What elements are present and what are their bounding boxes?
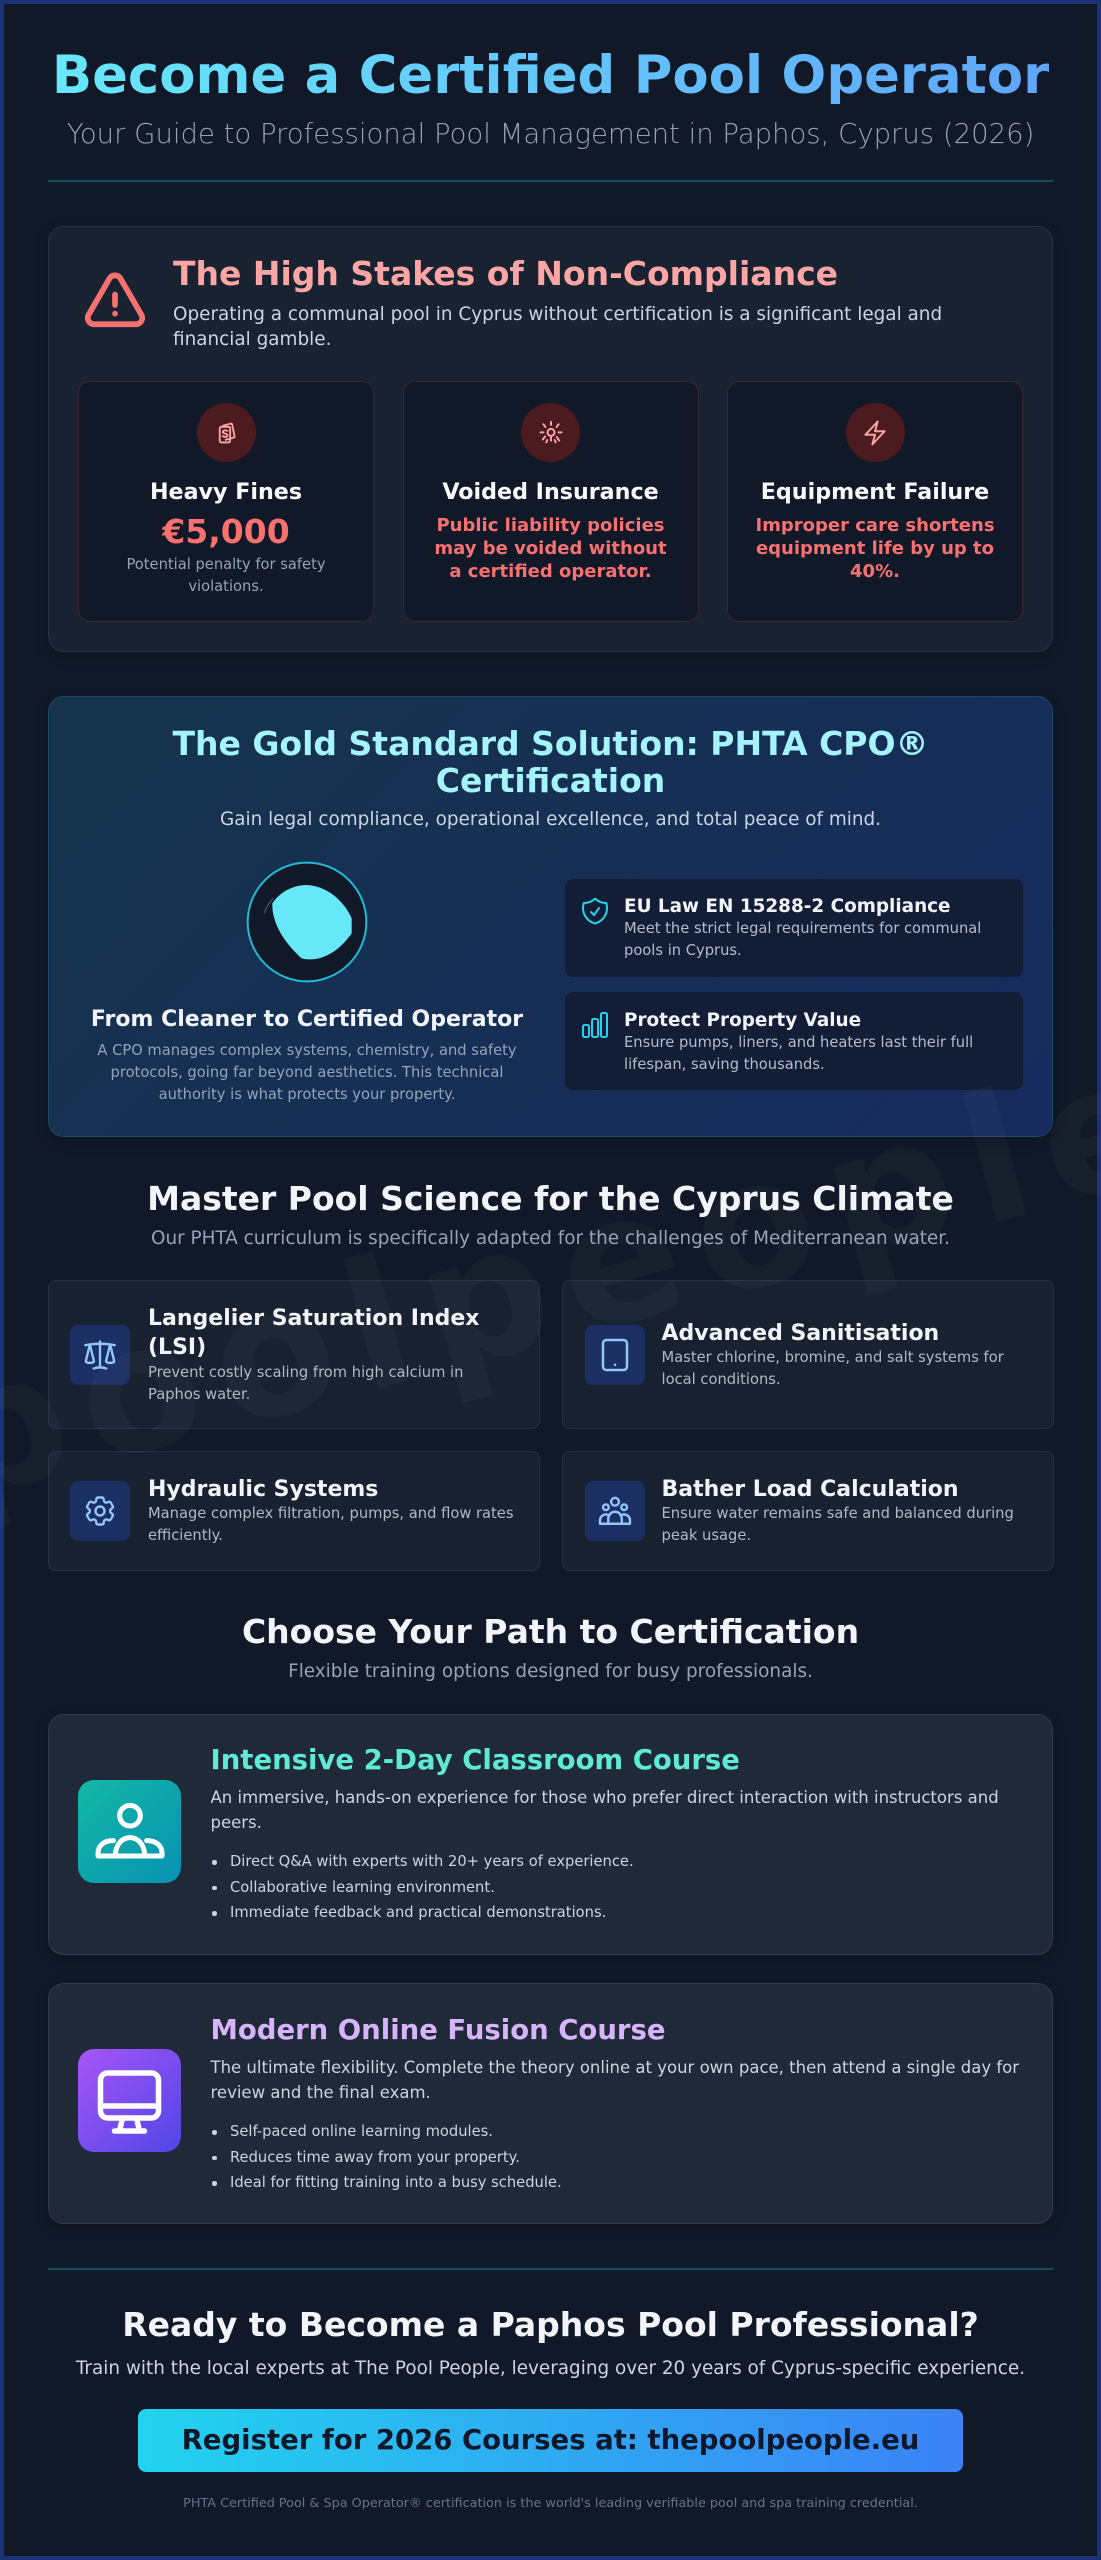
text: gold standard subtitle: Gain legal compliance, operational excellence, and total peace of mind.	[220, 809, 881, 830]
text: property value detail: lifespan, saving thousands.	[624, 1056, 825, 1073]
text: sanitisation detail	[662, 1349, 1004, 1388]
icon: fine money	[196, 403, 256, 462]
text: classroom description: peers.	[210, 1813, 262, 1832]
list: online benefits: Ideal for fitting training into a busy schedule.	[230, 2174, 562, 2191]
text: bather load detail	[662, 1505, 1014, 1544]
card: hydraulic systems	[48, 1451, 540, 1571]
list: classroom benefits: Collaborative learning environment.	[230, 1879, 495, 1896]
label: equipment failure: Equipment Failure	[761, 479, 989, 505]
text: sanitisation detail: local conditions.	[662, 1371, 781, 1388]
card: voided insurance	[402, 381, 698, 622]
text: fine description	[126, 556, 326, 595]
list: classroom benefits: Direct Q&A with experts with 20+ years of experience.	[230, 1853, 634, 1870]
icon: tablet	[585, 1325, 645, 1385]
icon: insurance spark	[521, 403, 580, 462]
text: high stakes intro: financial gamble.	[173, 329, 331, 350]
text: CPO description: authority is what protects your property.	[159, 1086, 455, 1103]
list: online benefits	[212, 2123, 562, 2191]
stat: fine amount: €5,000	[162, 512, 290, 551]
text: equipment warning: Improper care shortens	[755, 515, 995, 536]
card: equipment failure	[727, 381, 1023, 622]
text: hydraulic detail	[148, 1505, 513, 1544]
icon: scales	[70, 1325, 130, 1385]
icon: gear	[70, 1481, 130, 1541]
icon: lightning bolt	[846, 403, 904, 462]
heading: choose your path: Choose Your Path to Certification	[242, 1612, 859, 1651]
label: hydraulic systems: Hydraulic Systems	[148, 1477, 378, 1502]
text: insurance warning: may be voided without	[434, 538, 667, 559]
icon: certified badge	[246, 862, 368, 982]
heading: online course: Modern Online Fusion Course	[210, 2014, 666, 2046]
text: science subtitle: Our PHTA curriculum is specifically adapted for the challenges of Mediterranean water.	[151, 1228, 950, 1249]
list: classroom benefits	[212, 1853, 634, 1921]
card: advanced sanitisation	[562, 1280, 1054, 1429]
text: classroom description	[210, 1788, 999, 1832]
text: online description	[210, 2058, 1020, 2102]
text: equipment warning	[755, 515, 995, 582]
icon: shield check	[582, 898, 608, 924]
text: call to action subtitle: Train with the local experts at The Pool People, leveraging over 20 years of Cyprus-specific experience.	[76, 2358, 1025, 2379]
panel: high stakes of non-compliance	[48, 226, 1053, 652]
heading: gold standard: Certification	[436, 761, 665, 800]
text: footnote: PHTA Certified Pool & Spa Operator® certification is the world's leading verifiable pool and spa training credential.	[183, 2496, 918, 2511]
text: CPO description: protocols, going far beyond aesthetics. This technical	[111, 1064, 503, 1081]
list: online benefits: Self-paced online learning modules.	[230, 2123, 493, 2140]
button: register	[138, 2409, 963, 2472]
text: hydraulic detail: efficiently.	[148, 1527, 223, 1544]
label: LSI	[148, 1306, 480, 1360]
heading: high stakes: The High Stakes of Non-Compliance	[173, 254, 838, 293]
panel: online fusion course	[48, 1983, 1053, 2224]
text: CPO description: A CPO manages complex systems, chemistry, and safety	[97, 1042, 517, 1059]
heading: gold standard: The Gold Standard Solution: PHTA CPO®	[172, 724, 929, 763]
panel: classroom course	[48, 1714, 1053, 1955]
card: EU law compliance	[565, 879, 1023, 977]
label: LSI: Langelier Saturation Index	[148, 1306, 479, 1331]
label: bather load: Bather Load Calculation	[662, 1477, 959, 1502]
text: LSI detail: Prevent costly scaling from high calcium in	[148, 1364, 463, 1381]
text: property value detail: Ensure pumps, liners, and heaters last their full	[624, 1034, 973, 1051]
text: LSI detail: Paphos water.	[148, 1386, 250, 1403]
label: LSI: (LSI)	[148, 1335, 206, 1360]
text: sanitisation detail: Master chlorine, bromine, and salt systems for	[662, 1349, 1004, 1366]
text: EU law detail: pools in Cyprus.	[624, 942, 742, 959]
icon: monitor	[78, 2049, 180, 2152]
label: voided insurance: Voided Insurance	[442, 479, 659, 505]
heading: call to action: Ready to Become a Paphos Pool Professional?	[122, 2305, 979, 2344]
text: bather load detail: Ensure water remains safe and balanced during	[662, 1505, 1014, 1522]
heading: from cleaner to certified operator: From Cleaner to Certified Operator	[91, 1007, 523, 1032]
card: bather load calculation	[562, 1451, 1054, 1571]
list: classroom benefits: Immediate feedback and practical demonstrations.	[230, 1904, 606, 1921]
label: EU law: EU Law EN 15288-2 Compliance	[624, 896, 951, 917]
icon: people group	[585, 1481, 645, 1541]
text: classroom description: An immersive, hands-on experience for those who prefer direct interaction with instructors and	[210, 1788, 999, 1806]
label: sanitisation: Advanced Sanitisation	[662, 1321, 939, 1346]
text: EU law detail: Meet the strict legal requirements for communal	[624, 920, 981, 937]
card: LSI	[48, 1280, 540, 1429]
text: property value detail	[624, 1034, 973, 1073]
list: online benefits: Reduces time away from your property.	[230, 2149, 520, 2166]
card: heavy fines	[78, 381, 374, 622]
text: insurance warning: Public liability policies	[436, 515, 664, 536]
text: equipment warning: equipment life by up to	[756, 538, 994, 559]
icon: bar chart	[582, 1012, 608, 1038]
text: EU law detail	[624, 920, 981, 959]
text: fine description: Potential penalty for safety	[126, 556, 326, 573]
card: protect property value	[565, 992, 1023, 1090]
heading: master pool science: Master Pool Science for the Cyprus Climate	[147, 1179, 954, 1218]
text: bather load detail: peak usage.	[662, 1527, 751, 1544]
text: high stakes intro	[173, 304, 942, 350]
text: LSI detail	[148, 1364, 463, 1403]
text: fine description: violations.	[188, 578, 264, 595]
label: property value: Protect Property Value	[624, 1010, 861, 1031]
text: hydraulic detail: Manage complex filtration, pumps, and flow rates	[148, 1505, 513, 1522]
label: heavy fines: Heavy Fines	[150, 479, 302, 505]
text: CPO description	[97, 1042, 517, 1103]
text: path subtitle: Flexible training options designed for busy professionals.	[288, 1661, 813, 1682]
text: equipment warning: 40%.	[850, 561, 900, 582]
text: online description: review and the final exam.	[210, 2083, 431, 2102]
subtitle: Your Guide to Professional Pool Management in Paphos, Cyprus (2026)	[67, 118, 1034, 150]
text: insurance warning: a certified operator.	[449, 561, 652, 582]
button: register: Register for 2026 Courses at: thepoolpeople.eu	[182, 2424, 919, 2456]
text: insurance warning	[434, 515, 667, 582]
heading: gold standard	[172, 724, 929, 800]
panel: gold standard solution	[48, 696, 1053, 1137]
text: online description: The ultimate flexibility. Complete the theory online at your own pace, then attend a single day for	[210, 2058, 1019, 2076]
icon: warning triangle	[84, 272, 146, 328]
icon: classroom group	[78, 1780, 180, 1882]
heading: classroom course: Intensive 2-Day Classroom Course	[210, 1744, 740, 1776]
title: Become a Certified Pool Operator	[52, 45, 1049, 106]
text: high stakes intro: Operating a communal pool in Cyprus without certification is a significant legal and	[173, 304, 942, 325]
